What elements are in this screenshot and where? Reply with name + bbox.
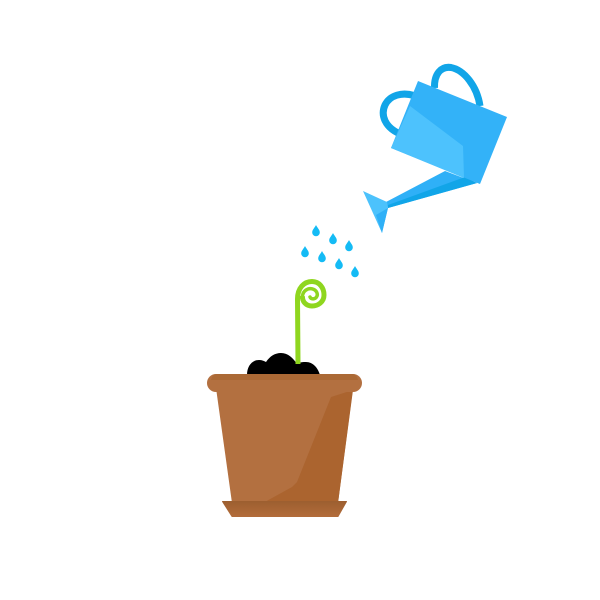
drop 6 [335, 258, 343, 269]
can body highlight [391, 106, 464, 178]
drop 3 [345, 240, 353, 251]
pot rim [207, 374, 362, 392]
icon: watering can [363, 67, 507, 233]
pot saucer [222, 502, 346, 516]
can side handle [383, 94, 414, 133]
can spout [386, 171, 477, 208]
drop 7 [351, 266, 359, 277]
water drops [301, 225, 359, 277]
icon: flower pot [207, 374, 362, 516]
rim shadow [211, 374, 358, 380]
soil mound [247, 353, 320, 375]
drop 4 [301, 246, 309, 257]
pot body shadow [263, 390, 353, 503]
pot body [216, 388, 353, 503]
can top handle [434, 67, 480, 106]
drop 1 [312, 225, 320, 236]
drop 2 [329, 233, 337, 244]
icon: sprout [298, 282, 324, 364]
can nozzle shadow [376, 208, 388, 233]
icon: soil [247, 353, 320, 375]
can spout nozzle [363, 191, 388, 233]
can spout shadow [388, 177, 477, 208]
drop 5 [318, 251, 326, 262]
can body [391, 81, 507, 184]
sprout stem and outer curl [298, 282, 324, 364]
sprout inner spiral [302, 289, 317, 299]
